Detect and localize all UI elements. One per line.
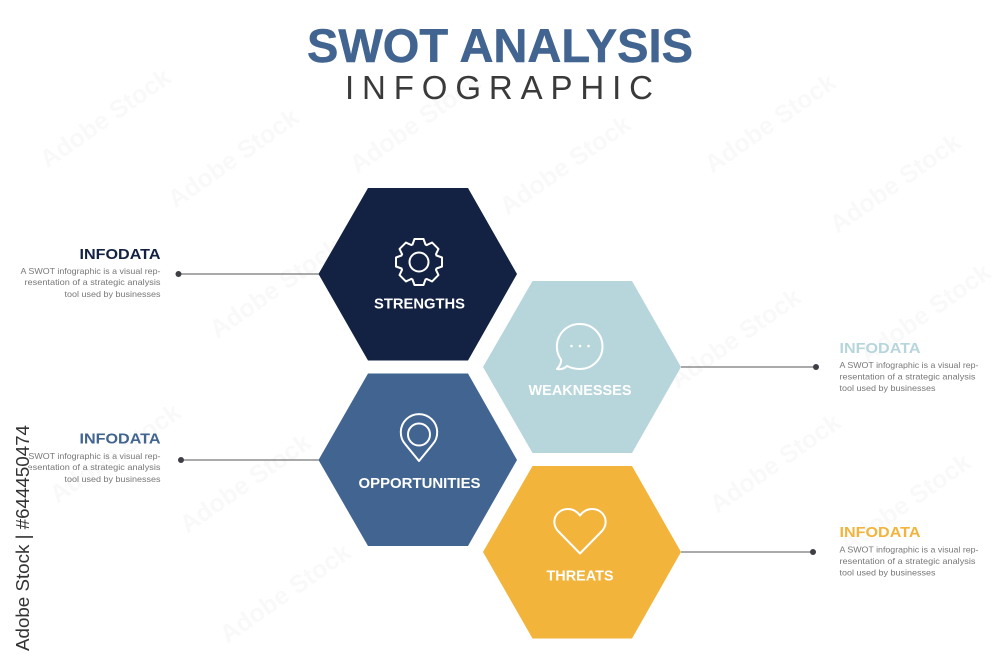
connector: strengths — [176, 271, 319, 277]
text block: strengths: resentation of a strategic analysis — [24, 277, 160, 287]
icon: map pin — [401, 414, 437, 461]
text block: threats: resentation of a strategic analysis — [840, 556, 976, 566]
text block: weaknesses: A SWOT infographic is a visual rep- — [840, 360, 979, 370]
heading: infodata light teal: INFODATA — [840, 340, 921, 357]
label: weaknesses: WEAKNESSES — [528, 382, 632, 399]
icon: heart — [554, 509, 606, 554]
text block: threats: tool used by businesses — [840, 568, 936, 578]
text block: threats — [840, 524, 979, 578]
text block: strengths: tool used by businesses — [64, 289, 160, 299]
icon: gear — [396, 239, 442, 285]
heading: infodata blue: INFODATA — [80, 430, 161, 448]
heading: infodata yellow: INFODATA — [840, 524, 921, 541]
connector: threats — [681, 549, 816, 555]
text: Adobe Stock — [825, 128, 966, 239]
label: threats: THREATS — [546, 568, 614, 584]
panel: opportunities — [318, 374, 517, 546]
label: opportunities: OPPORTUNITIES — [358, 475, 480, 492]
title: SWOT ANALYSIS — [307, 19, 693, 72]
text: Adobe Stock — [215, 538, 356, 649]
icon: speech bubble — [557, 324, 603, 369]
panel: threats — [483, 466, 681, 638]
connector: weaknesses — [681, 364, 819, 370]
text block: strengths: A SWOT infographic is a visual rep- — [20, 266, 161, 276]
text: Adobe Stock — [205, 233, 346, 344]
text block: strengths — [20, 246, 161, 299]
text: Adobe Stock — [175, 428, 316, 539]
text block: weaknesses: tool used by businesses — [840, 383, 936, 393]
stock id text: Adobe Stock | #644450474 — [13, 425, 33, 651]
text: Adobe Stock — [163, 103, 304, 214]
text block: opportunities: A SWOT infographic is a visual rep- — [20, 451, 161, 461]
panel: weaknesses — [483, 281, 681, 453]
text block: opportunities: tool used by businesses — [64, 474, 160, 484]
text: Adobe Stock — [705, 408, 846, 519]
text block: threats: A SWOT infographic is a visual rep- — [840, 544, 979, 554]
text: Adobe Stock — [855, 258, 996, 369]
panel: strengths — [318, 188, 517, 360]
heading: infodata navy: INFODATA — [80, 246, 161, 263]
text: Adobe Stock — [45, 398, 186, 509]
text block: opportunities — [20, 430, 161, 484]
text block: weaknesses — [840, 340, 979, 393]
text: Adobe Stock — [835, 448, 976, 559]
text: Adobe Stock — [700, 68, 841, 179]
text block: opportunities: resentation of a strategic analysis — [24, 462, 160, 472]
label: strengths: STRENGTHS — [374, 296, 465, 312]
connector: opportunities — [178, 457, 319, 463]
text block: weaknesses: resentation of a strategic analysis — [840, 372, 976, 382]
subtitle: INFOGRAPHIC — [345, 69, 653, 106]
text: Adobe Stock — [665, 283, 806, 394]
text: Adobe Stock — [495, 110, 636, 221]
text: Adobe Stock — [345, 68, 486, 179]
text: Adobe Stock — [35, 63, 176, 174]
